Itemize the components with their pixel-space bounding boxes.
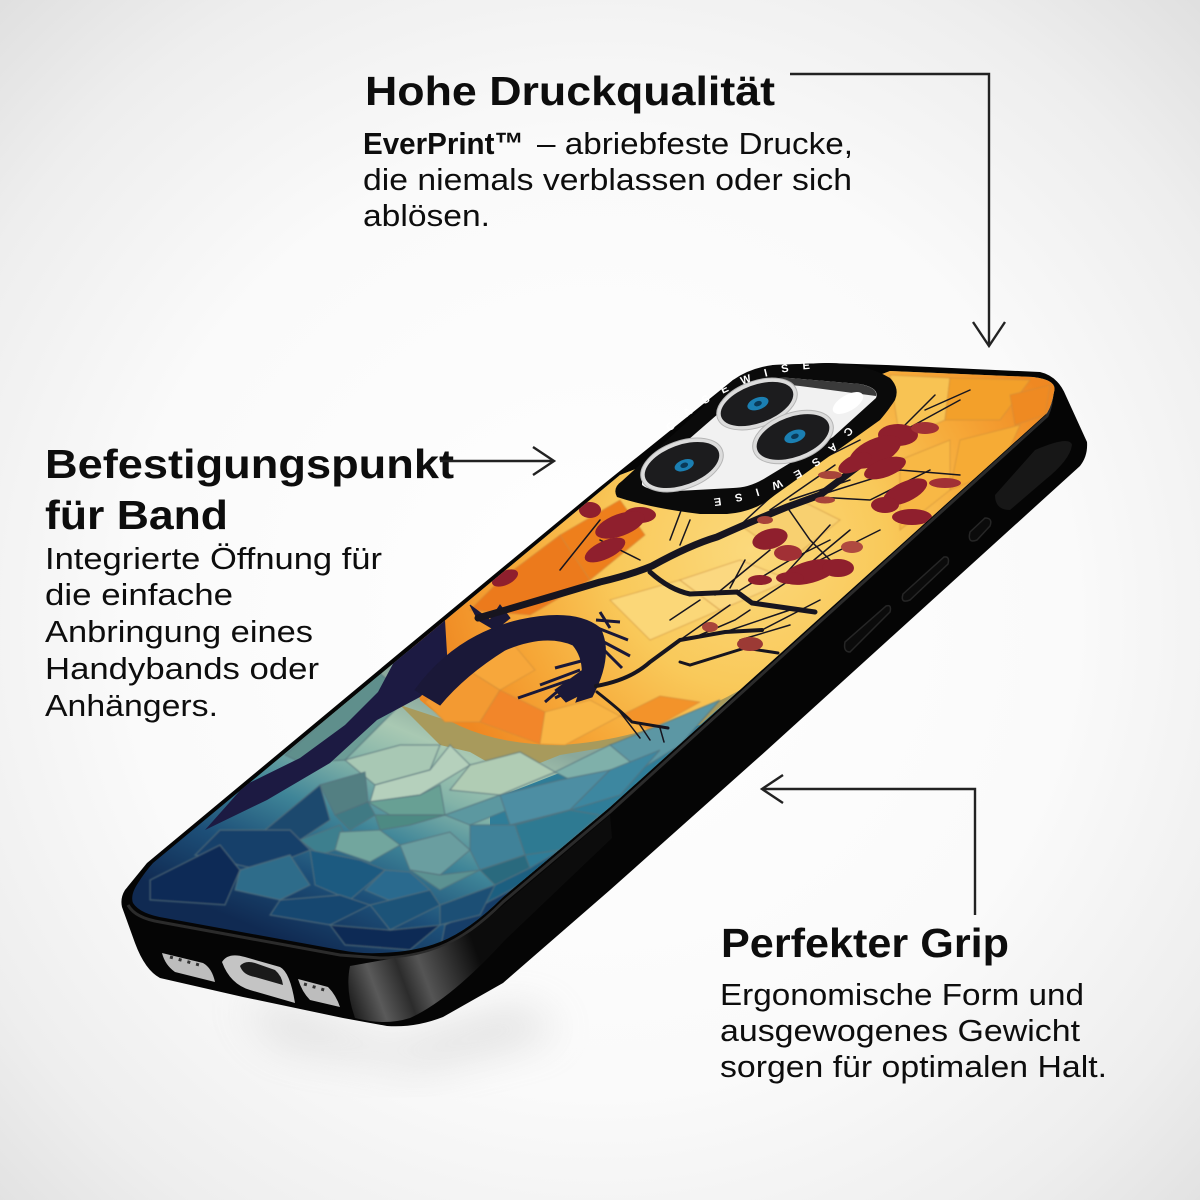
art: moon and sky	[412, 371, 1055, 745]
lens right	[745, 400, 841, 474]
body text: die einfache	[45, 577, 233, 612]
charging port openings	[162, 953, 340, 1007]
art: mosaic stones	[150, 672, 720, 950]
art: trunk	[205, 620, 448, 830]
callout: Perfekter Grip	[720, 920, 1107, 1084]
body text: Anhängers.	[45, 688, 218, 723]
ring lettering	[670, 364, 852, 506]
body text: EverPrint™	[363, 126, 524, 161]
heading: Perfekter Grip	[721, 920, 1009, 966]
heading	[45, 441, 454, 538]
body text	[45, 541, 382, 723]
phone drop shadow	[240, 1000, 560, 1065]
art: red blossoms	[489, 422, 961, 651]
body text: Ergonomische Form und	[720, 977, 1084, 1012]
heading: für Band	[45, 492, 228, 538]
case inner rim highlight	[128, 392, 1052, 958]
arrow: print quality	[790, 74, 1005, 346]
arrow: strap attachment	[440, 447, 554, 475]
art: moon horizon band	[402, 691, 738, 764]
heading: Hohe Druckqualität	[365, 68, 775, 114]
case body	[121, 363, 1087, 1026]
body text: ablösen.	[363, 198, 490, 233]
ring lettering: CASEWISE	[670, 364, 810, 430]
side buttons	[845, 441, 1072, 652]
usb port	[222, 955, 295, 1003]
heading: Befestigungspunkt	[45, 441, 454, 487]
art: right sea tint	[490, 709, 718, 880]
body text: ausgewogenes Gewicht	[720, 1013, 1080, 1048]
art: branches	[478, 390, 970, 742]
art: base	[132, 371, 1055, 954]
case glossy corner	[348, 815, 612, 1022]
body text: Integrierte Öffnung für	[45, 541, 382, 576]
speaker right	[298, 979, 340, 1007]
body text: sorgen für optimalen Halt.	[720, 1049, 1107, 1084]
camera ring	[615, 363, 897, 514]
lens top	[710, 368, 804, 440]
body text: Handybands oder	[45, 651, 319, 686]
phone case	[121, 363, 1088, 1026]
flash reflection	[829, 388, 867, 418]
body text: Anbringung eines	[45, 614, 313, 649]
lens left	[633, 428, 731, 502]
art: moon facets	[425, 375, 1050, 745]
art: dragon	[415, 605, 630, 705]
ring lettering: CASEWISE	[714, 428, 852, 506]
body text: – abriebfeste Drucke,	[537, 126, 853, 161]
body text	[720, 977, 1107, 1084]
body text: die niemals verblassen oder sich	[363, 162, 852, 197]
speaker left	[162, 953, 215, 982]
usb opening	[240, 962, 283, 985]
body text	[363, 126, 853, 233]
camera window shade	[745, 378, 876, 396]
callout: Befestigungspunkt	[45, 441, 454, 723]
callout: Hohe Druckqualität	[363, 68, 853, 233]
camera island	[615, 363, 897, 514]
arrow: grip	[762, 775, 975, 915]
camera window	[642, 378, 877, 491]
